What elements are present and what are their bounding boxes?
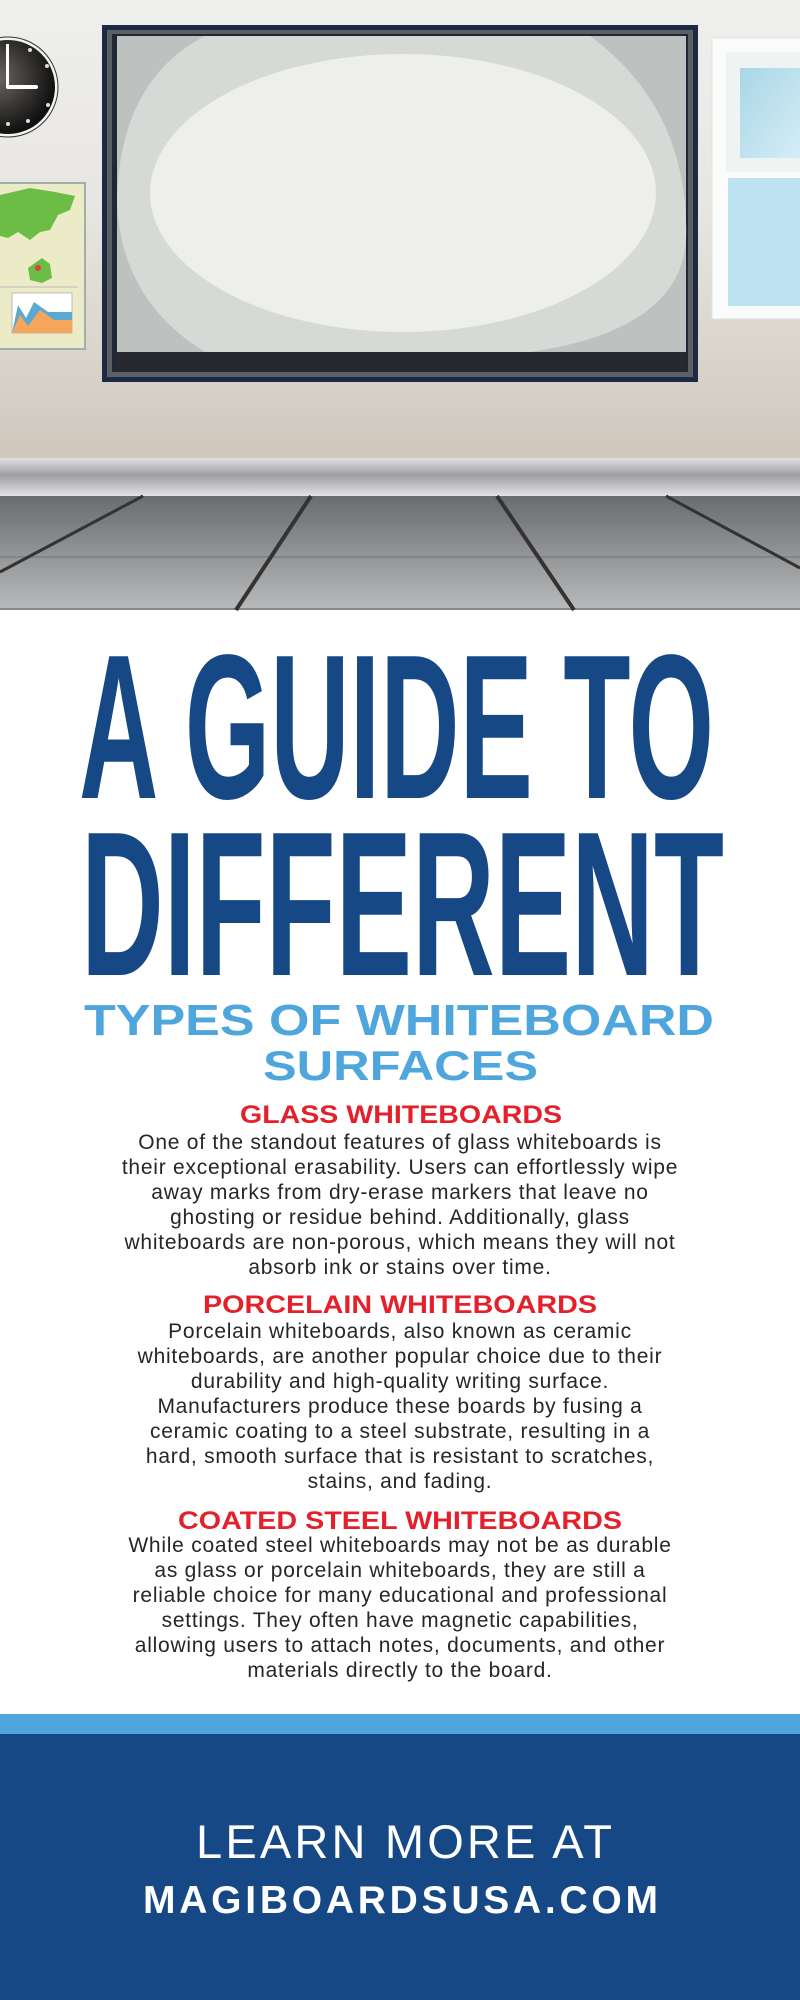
footer text — [143, 1815, 658, 1922]
section: glass whiteboards — [122, 1101, 678, 1279]
text: glass body: their exceptional erasability. Users can effortlessly wipe — [122, 1156, 678, 1179]
text: porcelain body: Manufacturers produce these boards by fusing a — [157, 1395, 643, 1418]
text: porcelain body: ceramic coating to a steel substrate, resulting in a — [150, 1420, 650, 1443]
subtitle: SURFACES — [263, 1042, 538, 1089]
text: glass body: away marks from dry-erase markers that leave no — [151, 1181, 649, 1204]
text: porcelain body: Porcelain whiteboards, also known as ceramic — [168, 1320, 632, 1343]
baseboard — [0, 458, 800, 496]
icon: world map poster — [0, 183, 85, 349]
scene: classroom illustration — [0, 0, 800, 612]
text: glass body — [122, 1131, 678, 1279]
text: coated steel body: While coated steel whiteboards may not be as durable — [128, 1534, 672, 1557]
footer text: MAGIBOARDSUSA.COM — [143, 1879, 658, 1922]
text: porcelain body: whiteboards, are another popular choice due to their — [138, 1345, 662, 1368]
icon: wall clock — [0, 37, 58, 137]
title — [79, 630, 724, 1089]
text: coated steel body: allowing users to attach notes, documents, and other — [135, 1634, 665, 1657]
text: coated steel body: as glass or porcelain whiteboards, they are still a — [154, 1559, 646, 1582]
text: coated steel body: materials directly to the board. — [247, 1659, 553, 1682]
text: glass body: whiteboards are non-porous, which means they will not — [124, 1231, 676, 1254]
section: porcelain whiteboards — [138, 1291, 662, 1493]
whiteboard illustration — [102, 25, 698, 382]
subtitle: TYPES OF WHITEBOARD — [84, 996, 714, 1045]
text: glass body: One of the standout features of glass whiteboards is — [138, 1131, 662, 1154]
text: porcelain body: hard, smooth surface that is resistant to scratches, — [146, 1445, 654, 1468]
text: porcelain body — [138, 1320, 662, 1493]
text: coated steel body: reliable choice for many educational and professional — [133, 1584, 667, 1607]
text: coated steel body: settings. They often have magnetic capabilities, — [162, 1609, 638, 1632]
footer — [0, 1714, 800, 2000]
text: glass body: ghosting or residue behind. Additionally, glass — [170, 1206, 630, 1229]
text: coated steel body — [128, 1534, 672, 1682]
footer text: LEARN MORE AT — [196, 1815, 612, 1868]
text: porcelain body: durability and high-quality writing surface. — [191, 1370, 609, 1393]
text: glass body: absorb ink or stains over time. — [248, 1256, 552, 1279]
floor tiles — [0, 496, 800, 610]
icon: window — [712, 38, 800, 319]
subtitle — [84, 996, 714, 1089]
section: coated steel whiteboards — [128, 1507, 672, 1682]
text: porcelain body: stains, and fading. — [308, 1470, 492, 1493]
